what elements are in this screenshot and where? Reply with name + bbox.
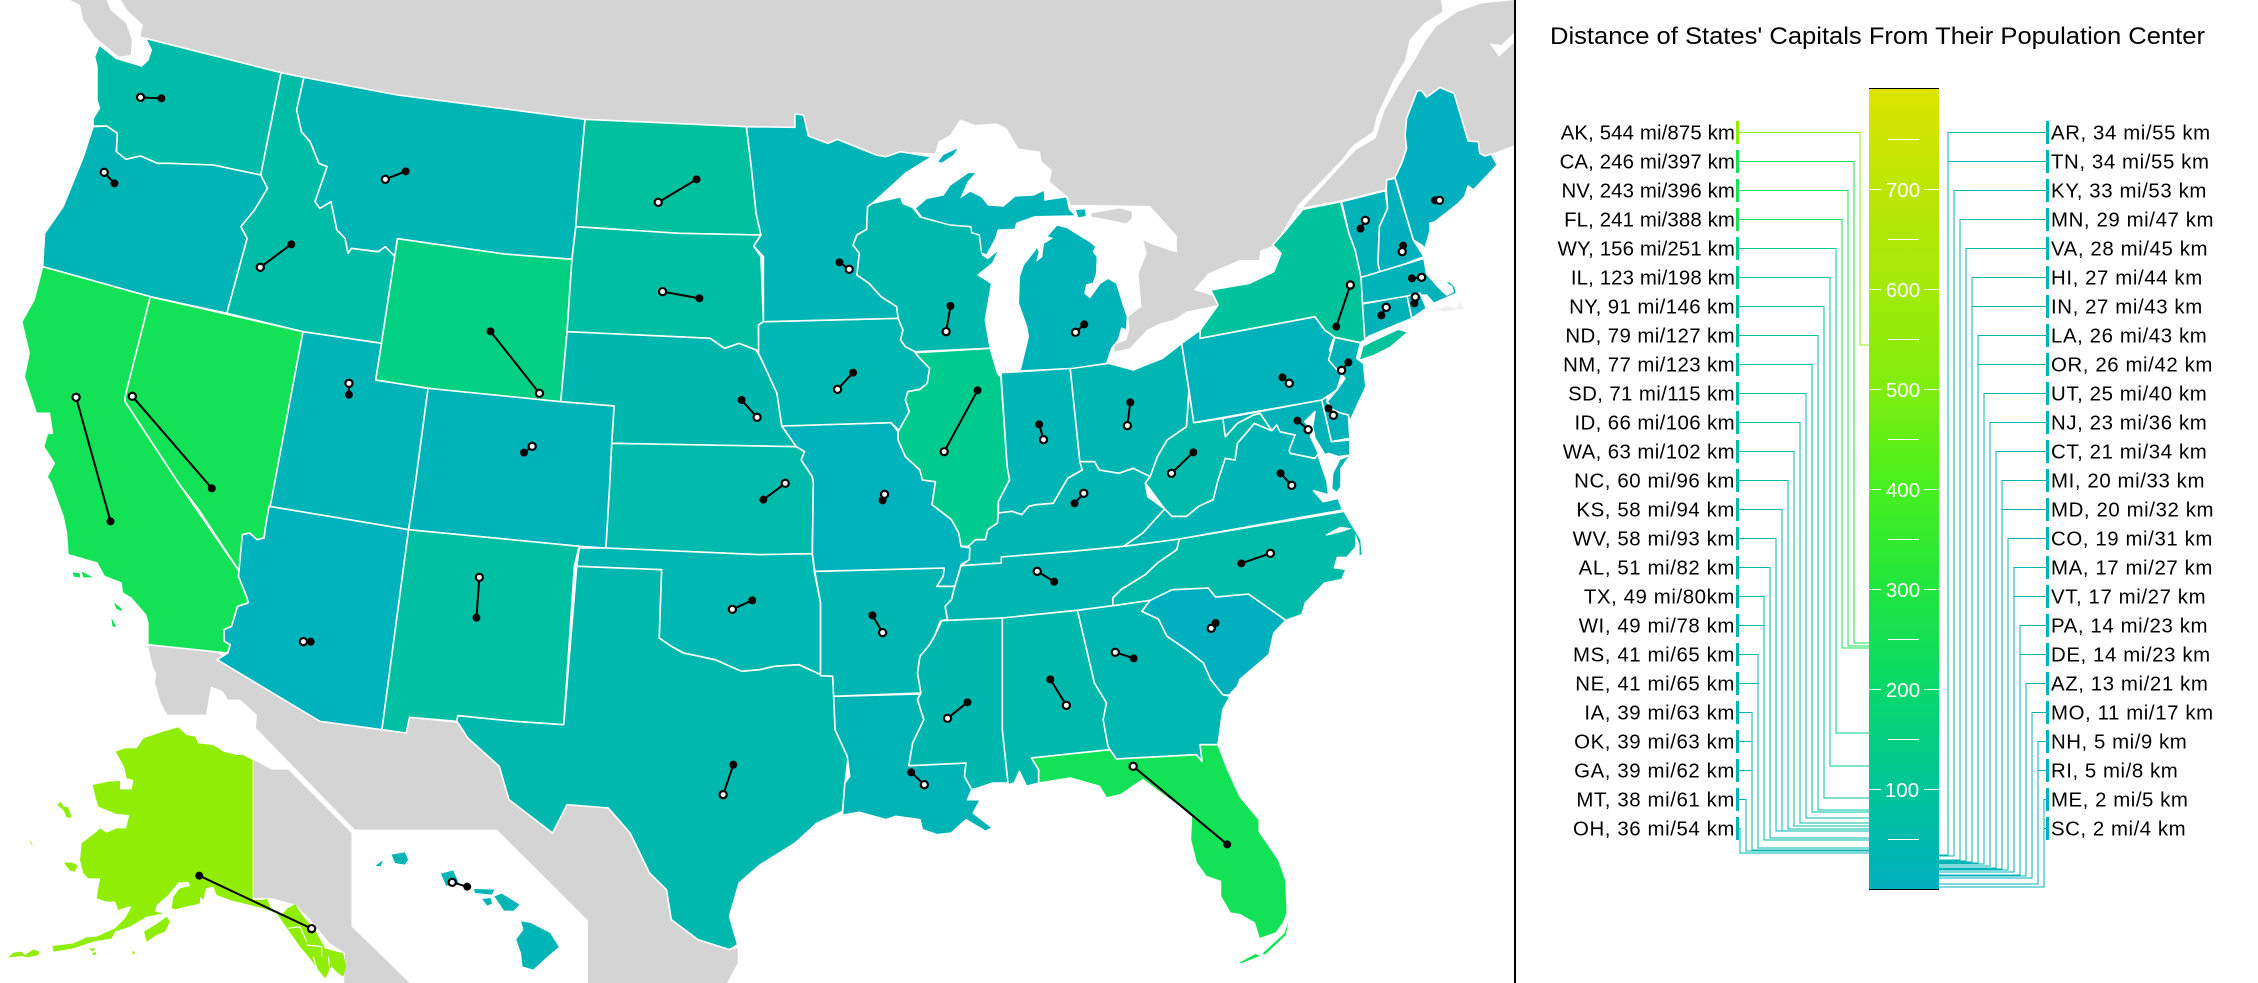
label: ND: ND, 79 mi/127 km (1565, 326, 1735, 348)
label: SC (1939, 817, 2186, 887)
state: Minnesota (746, 114, 932, 322)
state: Kentucky (961, 462, 1165, 566)
label: HI: HI, 27 mi/44 km (2051, 268, 2203, 290)
map of the United States (22, 0, 1515, 983)
state: Connecticut (1362, 296, 1412, 340)
label: OK (1574, 730, 1869, 850)
label: AK (1561, 121, 1869, 345)
state: Wyoming (376, 239, 572, 402)
label: GA: GA, 39 mi/62 km (1574, 761, 1735, 783)
label: NJ: NJ, 23 mi/36 km (2051, 413, 2207, 435)
label: IL: IL, 123 mi/198 km (1571, 268, 1735, 290)
label: IL (1571, 266, 1869, 766)
label: MA (1939, 556, 2213, 872)
state: Massachusetts (1361, 258, 1456, 303)
state: Iowa (759, 318, 930, 432)
label: VA (1939, 237, 2208, 861)
neighbouring land: Mexico and Yukon inset (148, 645, 738, 983)
mackinac island (1076, 209, 1086, 217)
link: TN (1034, 568, 1058, 586)
state: Utah (269, 332, 428, 530)
label: TX: TX, 49 mi/80km (1584, 587, 1735, 609)
long island (1360, 330, 1407, 359)
state: New Jersey (1327, 337, 1366, 422)
aleutian islands (8, 949, 39, 957)
colour scale bar (1869, 88, 1939, 890)
link: NH (1399, 242, 1407, 255)
label: DE (1939, 643, 2211, 875)
alaska mainland and panhandle (53, 727, 346, 978)
label: TN (1939, 150, 2210, 855)
label: TX (1584, 585, 1869, 840)
nunivak island (64, 863, 78, 872)
label: NV: NV, 243 mi/396 km (1561, 181, 1735, 203)
state: Montana (297, 77, 585, 259)
label: ME (1939, 788, 2188, 887)
label: NE (1575, 672, 1869, 848)
state: North Dakota (576, 119, 761, 235)
florida keys (1240, 922, 1288, 963)
label: KY: KY, 33 mi/53 km (2051, 181, 2207, 203)
state: Maine (1395, 87, 1497, 248)
label: CA: CA, 246 mi/397 km (1560, 152, 1735, 174)
label: NH: NH, 5 mi/9 km (2051, 732, 2187, 754)
label: CT (1939, 440, 2207, 868)
state: Georgia (1077, 600, 1230, 761)
link: OK (729, 596, 756, 613)
label: ID (1574, 411, 1869, 823)
label: MS: MS, 41 mi/65 km (1573, 645, 1735, 667)
link: WY (487, 327, 543, 397)
link: AZ (300, 638, 315, 646)
state: New Hampshire (1378, 178, 1424, 273)
state: West Virginia (1145, 392, 1272, 516)
link: NE (738, 396, 761, 421)
label: AK: AK, 544 mi/875 km (1561, 123, 1735, 145)
state: Idaho (227, 73, 395, 343)
link: MA (1408, 274, 1425, 282)
link: VA (1277, 469, 1295, 489)
label: FL: FL, 241 mi/388 km (1564, 210, 1735, 232)
link: IL (941, 386, 982, 455)
link: HI (449, 879, 471, 891)
label: KS (1576, 498, 1869, 831)
capital to population center links (73, 94, 1443, 848)
label: OR: OR, 26 mi/42 km (2051, 355, 2213, 377)
st lawrence island (57, 802, 72, 818)
label: OR (1939, 353, 2213, 863)
link: AK (195, 872, 315, 932)
colour scale bar: 200 (1886, 679, 1920, 702)
label: MD: MD, 20 mi/32 km (2051, 500, 2214, 522)
link: MN (836, 258, 853, 273)
state: North Carolina (1113, 511, 1362, 620)
link: OH (1124, 398, 1134, 429)
state: Illinois (898, 348, 1010, 546)
inset: Hawaii (376, 852, 559, 970)
link: ID (257, 240, 295, 271)
label: WI (1579, 614, 1869, 840)
link: UT (345, 380, 353, 399)
right labels and connectors (1939, 121, 2214, 887)
state: Tennessee (942, 539, 1179, 621)
colour scale bar: 600 (1886, 279, 1920, 302)
label: ID: ID, 66 mi/106 km (1574, 413, 1735, 435)
label: GA (1574, 759, 1869, 850)
label: MT: MT, 38 mi/61 km (1576, 790, 1735, 812)
state: Nebraska (561, 332, 796, 447)
state: Michigan and Wisconsin lakeshore (915, 148, 1127, 371)
link: LA (907, 768, 928, 788)
link: MI (1072, 320, 1088, 336)
label: SD: SD, 71 mi/115 km (1568, 384, 1735, 406)
label: MI: MI, 20 mi/33 km (2051, 471, 2205, 493)
state: Delaware (1322, 395, 1350, 442)
link: KY (1071, 490, 1087, 507)
link: DE (1325, 404, 1337, 419)
label: MA: MA, 17 mi/27 km (2051, 558, 2213, 580)
state: Alabama (1002, 610, 1110, 786)
label: NV (1561, 179, 1869, 646)
label: MN: MN, 29 mi/47 km (2051, 210, 2214, 232)
state: South Carolina (1142, 588, 1286, 695)
label: WY: WY, 156 mi/251 km (1558, 239, 1735, 261)
label: IA (1584, 701, 1869, 850)
link: NY (1332, 281, 1354, 331)
state: Washington (93, 38, 281, 175)
label: NM (1563, 353, 1869, 812)
label: IN: IN, 27 mi/43 km (2051, 297, 2203, 319)
label: VT (1939, 585, 2206, 872)
label: SC: SC, 2 mi/4 km (2051, 819, 2186, 841)
label: AR: AR, 34 mi/55 km (2051, 123, 2211, 145)
link: WA (137, 94, 165, 102)
state: New York (1200, 202, 1365, 343)
link: MD (1294, 417, 1312, 433)
link: MO (879, 491, 888, 504)
label: CA (1560, 150, 1869, 643)
state shapes (22, 38, 1497, 963)
link: TX (720, 761, 737, 798)
label: AL (1579, 556, 1869, 838)
inset: Alaska (8, 727, 346, 978)
colour scale bar: 100 (1885, 779, 1919, 802)
label: RI (1939, 759, 2178, 884)
state: Missouri (782, 423, 970, 586)
label: NC (1574, 469, 1869, 829)
Michigan lower peninsula (1018, 225, 1127, 371)
label: ND (1565, 324, 1869, 810)
label: OH (1573, 817, 1869, 853)
label: MS (1573, 643, 1869, 848)
label: LA: LA, 26 mi/43 km (2051, 326, 2207, 348)
label: OK: OK, 39 mi/63 km (1574, 732, 1735, 754)
label: VT: VT, 17 mi/27 km (2051, 587, 2206, 609)
state: Arizona (217, 506, 409, 730)
label: MT (1576, 788, 1869, 851)
label: IN (1939, 295, 2203, 862)
state: Mississippi (909, 618, 1008, 790)
link: CA (73, 394, 114, 525)
state: Wisconsin (853, 197, 1000, 352)
state: New Mexico (382, 530, 579, 733)
state: Pennsylvania (1182, 317, 1342, 423)
label: AL: AL, 51 mi/82 km (1579, 558, 1735, 580)
label: WV (1573, 527, 1869, 831)
neighbouring land: Canada (70, 0, 1515, 352)
link: MT (382, 167, 410, 183)
label: TN: TN, 34 mi/55 km (2051, 152, 2210, 174)
label: DE: DE, 14 mi/23 km (2051, 645, 2211, 667)
link: IA (834, 369, 857, 393)
panel divider (1514, 0, 1516, 983)
label: NH (1939, 730, 2187, 884)
label: UT (1939, 382, 2207, 864)
link: RI (1410, 293, 1419, 307)
link: AL (1046, 675, 1070, 709)
state: Maryland (1223, 400, 1350, 458)
label: NM: NM, 77 mi/123 km (1563, 355, 1735, 377)
label: IA: IA, 39 mi/63 km (1584, 703, 1735, 725)
label: LA (1939, 324, 2207, 863)
link: VT (1357, 217, 1369, 233)
label: WA: WA, 63 mi/102 km (1563, 442, 1735, 464)
link: NV (129, 393, 216, 492)
label: NJ (1939, 411, 2207, 866)
label: MO: MO, 11 mi/17 km (2051, 703, 2214, 725)
state: Florida (1031, 745, 1287, 939)
state: Rhode Island (1407, 293, 1426, 318)
label: KY (1939, 179, 2207, 856)
Michigan upper peninsula (915, 172, 1076, 255)
state: Colorado (409, 388, 614, 548)
kodiak island (144, 917, 170, 942)
link: GA (1112, 649, 1138, 662)
label: MI (1939, 469, 2205, 869)
link: FL (1130, 763, 1231, 848)
label: RI: RI, 5 mi/8 km (2051, 761, 2178, 783)
link: SC (1208, 619, 1220, 632)
link: WV (1168, 448, 1197, 477)
label: PA (1939, 614, 2208, 875)
label: HI (1939, 266, 2203, 862)
state: Oregon (43, 126, 268, 313)
state: Ohio (1070, 343, 1189, 477)
label: NY: NY, 91 mi/146 km (1569, 297, 1735, 319)
link: AR (868, 611, 886, 636)
label: UT: UT, 25 mi/40 km (2051, 384, 2207, 406)
link: SD (659, 288, 703, 302)
link: ME (1431, 196, 1443, 204)
left labels and connectors (1558, 121, 1869, 853)
label: WY (1558, 237, 1869, 733)
label: AZ: AZ, 13 mi/21 km (2051, 674, 2208, 696)
link: NJ (1338, 358, 1352, 374)
label: WV: WV, 58 mi/93 km (1573, 529, 1735, 551)
label: CO (1939, 527, 2213, 870)
label: MD (1939, 498, 2214, 869)
state: Louisiana (834, 694, 993, 835)
link: WI (943, 302, 954, 335)
title: Distance of States' Capitals From Their Population Center (1550, 23, 2205, 50)
label: NC: NC, 60 mi/96 km (1574, 471, 1735, 493)
state: Oklahoma (577, 548, 821, 675)
label: OH: OH, 36 mi/54 km (1573, 819, 1735, 841)
state: Vermont (1342, 191, 1388, 277)
label: KS: KS, 58 mi/94 km (1576, 500, 1735, 522)
colour scale bar: 300 (1886, 579, 1920, 602)
label: FL (1564, 208, 1869, 648)
virginia eastern shore (1332, 457, 1348, 492)
links over Michigan and Wisconsin (943, 302, 1088, 336)
colour scale bar: 500 (1886, 379, 1920, 402)
label: WA (1563, 440, 1869, 826)
link: PA (1279, 373, 1293, 387)
label: CO: CO, 19 mi/31 km (2051, 529, 2213, 551)
state: South Dakota (567, 227, 763, 357)
nantucket and martha's vineyard (1435, 302, 1464, 312)
colour scale bar: 700 (1886, 179, 1920, 202)
link: KS (759, 480, 789, 504)
link: CT (1377, 304, 1390, 319)
link: NC (1237, 550, 1274, 567)
label: PA: PA, 14 mi/23 km (2051, 616, 2208, 638)
state: Arkansas (815, 568, 955, 696)
label: AR (1939, 121, 2211, 855)
state: Virginia (1124, 423, 1343, 546)
channel islands (73, 571, 122, 627)
label: MO (1939, 701, 2214, 878)
isle royale (938, 148, 958, 163)
label: NY (1569, 295, 1869, 798)
label: AZ (1939, 672, 2208, 876)
label: CT: CT, 21 mi/34 km (2051, 442, 2207, 464)
label: NE: NE, 41 mi/65 km (1575, 674, 1735, 696)
link: MS (944, 698, 971, 722)
state: Nevada (125, 297, 303, 572)
link: IN (1035, 420, 1047, 443)
label: WI: WI, 49 mi/78 km (1579, 616, 1735, 638)
label: VA: VA, 28 mi/45 km (2051, 239, 2208, 261)
label: ME: ME, 2 mi/5 km (2051, 790, 2188, 812)
colour scale bar: 400 (1886, 479, 1920, 502)
label: MN (1939, 208, 2214, 860)
label: SD (1568, 382, 1869, 818)
panel: right side background (1515, 0, 2258, 983)
state: Indiana (998, 368, 1082, 515)
link: CO (520, 443, 536, 457)
state: Kansas (606, 443, 813, 555)
link: OR (101, 169, 118, 187)
state: Texas (457, 566, 848, 950)
state: California (22, 267, 248, 653)
link: ND (655, 175, 700, 206)
link: NM (472, 574, 483, 622)
